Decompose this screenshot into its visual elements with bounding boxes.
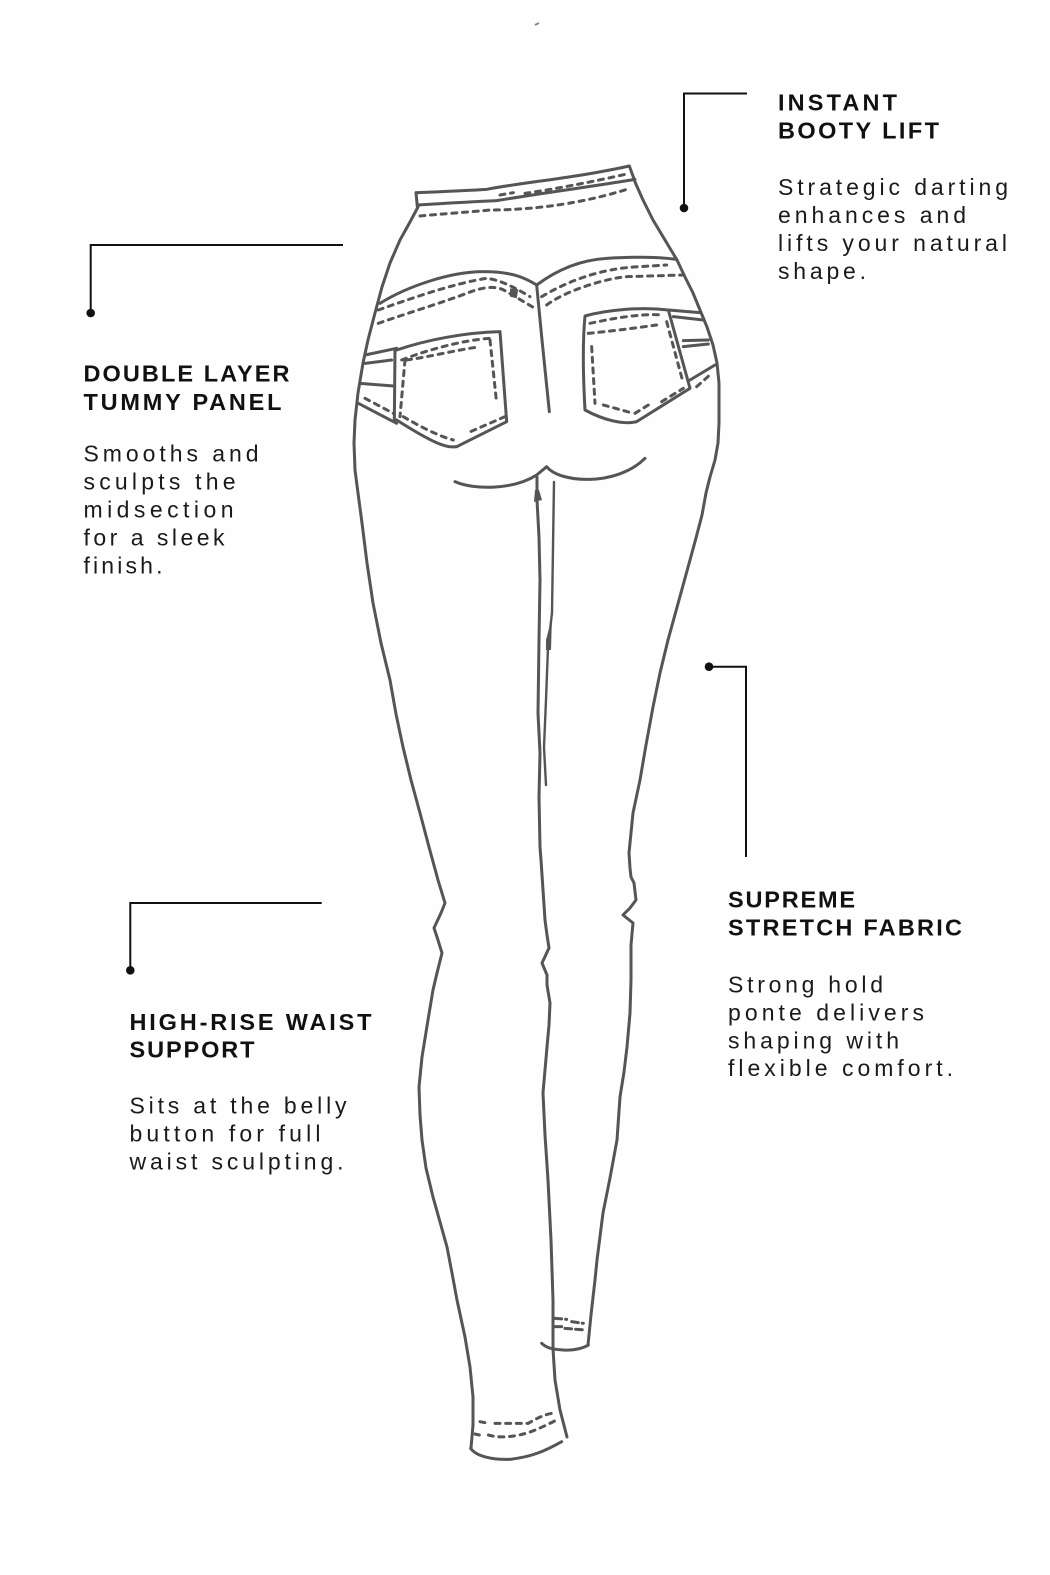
- body text: [778, 174, 1008, 284]
- heading: DOUBLE LAYER: [84, 361, 290, 387]
- body text: flexible comfort.: [728, 1055, 953, 1081]
- seat crease: [455, 458, 645, 487]
- leader line: [705, 662, 746, 857]
- left pocket: [358, 332, 507, 447]
- leader line: [86, 245, 343, 317]
- leader line: [126, 903, 322, 975]
- heading: INSTANT: [778, 90, 898, 116]
- heading: BOOTY LIFT: [778, 117, 940, 143]
- right outer leg outline: [588, 182, 719, 1345]
- heading: SUPPORT: [130, 1037, 255, 1063]
- body text: [128, 1092, 347, 1174]
- body text: lifts your natural: [778, 230, 1007, 256]
- body text: [728, 971, 953, 1081]
- hems: [471, 1318, 588, 1459]
- callout: double layer tummy panel: [84, 245, 343, 579]
- body text: shape.: [778, 258, 866, 284]
- left outer leg outline: [354, 207, 473, 1448]
- heading: [778, 90, 940, 143]
- body text: midsection: [84, 497, 234, 523]
- illustration: leggings back view line drawing: [354, 23, 719, 1459]
- heading: TUMMY PANEL: [84, 389, 282, 415]
- heading: [84, 361, 290, 415]
- body text: waist sculpting.: [128, 1148, 344, 1174]
- speck: [535, 23, 539, 25]
- callout: instant booty lift: [680, 90, 1008, 284]
- yoke seam: [378, 257, 683, 412]
- heading: [130, 1009, 372, 1063]
- heading: STRETCH FABRIC: [728, 915, 962, 941]
- waistband: [416, 166, 635, 216]
- waistband, yoke and pockets: [358, 166, 715, 487]
- body text: Strategic darting: [778, 174, 1008, 200]
- right pocket: [583, 309, 715, 423]
- inner leg seam: [537, 477, 567, 1437]
- body text: Strong hold: [728, 971, 883, 997]
- heading: SUPREME: [728, 887, 855, 913]
- callout: high-rise waist support: [126, 903, 372, 1174]
- heading: [728, 887, 962, 941]
- callout: supreme stretch fabric: [705, 662, 962, 1081]
- body text: ponte delivers: [728, 999, 924, 1025]
- body text: for a sleek: [84, 525, 225, 551]
- body text: finish.: [84, 553, 162, 579]
- body text: Sits at the belly: [130, 1092, 347, 1118]
- leader line: [680, 94, 747, 212]
- front ankle hem: [471, 1413, 562, 1459]
- back ankle hem: [542, 1318, 588, 1350]
- body text: Smooths and: [84, 441, 258, 467]
- body text: enhances and: [778, 202, 966, 228]
- body text: [84, 441, 258, 579]
- inner thigh crease: [534, 482, 554, 785]
- body text: sculpts the: [84, 469, 236, 495]
- heading: HIGH-RISE WAIST: [130, 1009, 372, 1035]
- body text: button for full: [130, 1120, 320, 1146]
- body text: shaping with: [728, 1027, 899, 1053]
